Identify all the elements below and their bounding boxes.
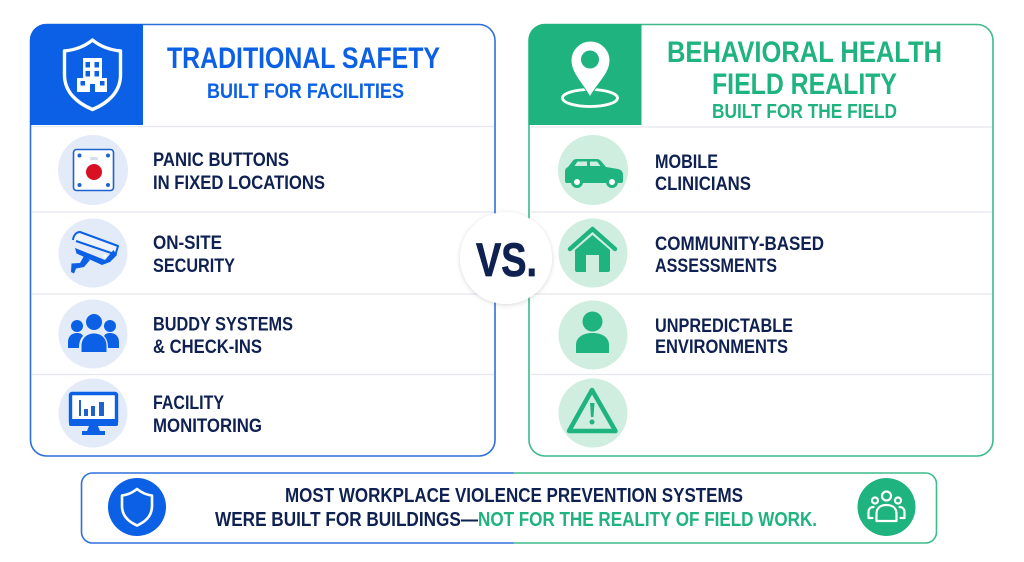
heading: behavioral health field reality: BEHAVIORAL HEALTH bbox=[667, 36, 942, 69]
icon: monitor with bars bbox=[69, 394, 118, 435]
row: panic buttons bbox=[58, 135, 325, 205]
icon: warning triangle bbox=[569, 390, 616, 431]
row: mobile clinicians: CLINICIANS bbox=[655, 174, 751, 195]
heading: behavioral health field reality bbox=[667, 36, 942, 101]
subheading: built for facilities: BUILT FOR FACILITIES bbox=[207, 79, 404, 103]
row: facility monitoring: MONITORING bbox=[153, 416, 262, 437]
subheading: built for the field: BUILT FOR THE FIELD bbox=[712, 100, 897, 123]
icon: panic button bbox=[74, 150, 114, 190]
header block: green bbox=[528, 24, 642, 125]
text: banner message: NOT FOR THE REALITY OF FIELD WORK. bbox=[478, 508, 817, 531]
heading: traditional safety: TRADITIONAL SAFETY bbox=[167, 42, 440, 75]
row: unpredictable environments: UNPREDICTABLE bbox=[655, 316, 793, 337]
row: community-based assessments: ASSESSMENTS bbox=[655, 256, 777, 277]
icon: person bbox=[576, 312, 609, 353]
row: buddy systems: BUDDY SYSTEMS bbox=[153, 314, 293, 336]
row: on-site security: SECURITY bbox=[153, 256, 235, 277]
row: buddy systems: & CHECK-INS bbox=[153, 337, 262, 358]
panel: traditional safety bbox=[30, 24, 495, 456]
row: panic buttons: IN FIXED LOCATIONS bbox=[153, 173, 325, 194]
panel: behavioral health field reality bbox=[528, 24, 993, 456]
text: banner message: WERE BUILT FOR BUILDINGS— bbox=[215, 508, 478, 531]
row: unpredictable environments bbox=[558, 300, 793, 370]
icon: car bbox=[565, 159, 623, 186]
text: banner message bbox=[215, 484, 817, 531]
row: mobile clinicians: MOBILE bbox=[655, 152, 718, 173]
icon: shield badge bbox=[108, 478, 166, 536]
row: warning icon bbox=[558, 378, 628, 448]
row: facility monitoring: FACILITY bbox=[153, 393, 224, 414]
icon: security camera bbox=[71, 232, 118, 274]
vs badge bbox=[460, 212, 552, 304]
icon: shield with building bbox=[64, 40, 120, 110]
header block: blue bbox=[30, 24, 143, 125]
icon: location pin bbox=[562, 41, 618, 106]
vs badge: VS. bbox=[476, 233, 537, 286]
row: community-based assessments bbox=[558, 218, 824, 288]
icon: team badge bbox=[858, 478, 916, 536]
icon: house bbox=[570, 229, 615, 272]
row: mobile clinicians bbox=[558, 135, 751, 205]
callout: bottom banner bbox=[82, 473, 936, 543]
heading: behavioral health field reality: FIELD REALITY bbox=[712, 68, 897, 101]
row: buddy systems bbox=[58, 300, 293, 368]
text: banner message: MOST WORKPLACE VIOLENCE PREVENTION SYSTEMS bbox=[285, 484, 743, 507]
row: unpredictable environments: ENVIRONMENTS bbox=[655, 337, 788, 358]
row: facility monitoring bbox=[58, 378, 262, 448]
row: panic buttons: PANIC BUTTONS bbox=[153, 150, 289, 171]
row: on-site security bbox=[58, 218, 235, 288]
row: community-based assessments: COMMUNITY-BASED bbox=[655, 234, 824, 255]
row: on-site security: ON-SITE bbox=[153, 233, 222, 254]
icon: group of people bbox=[68, 314, 119, 352]
